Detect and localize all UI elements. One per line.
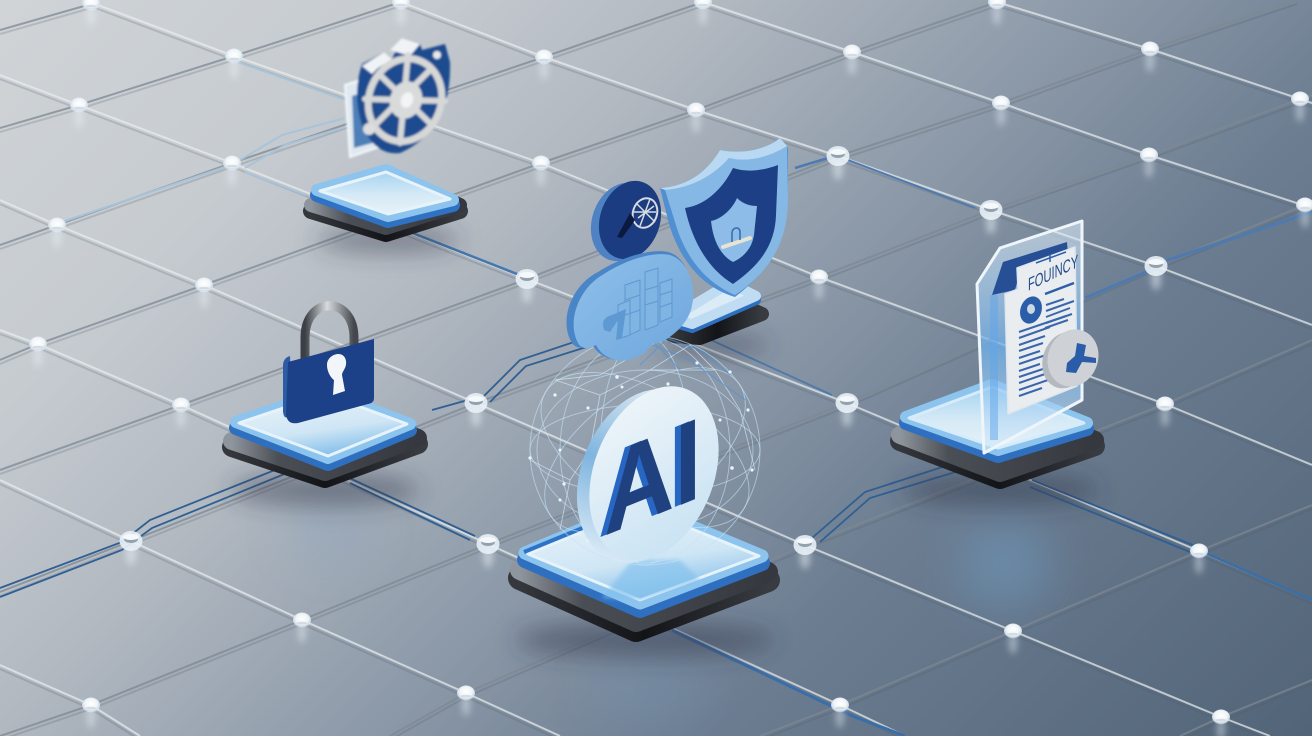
blue circuit traces, lower [0,155,1312,736]
floor glow reflections [285,500,1053,720]
icon: gear wheel [345,38,453,157]
lock shackle [305,306,354,362]
label: AI extrusion: AI [598,395,695,563]
shield inner [685,165,778,284]
icon: policy document [977,221,1106,453]
inner crest [711,198,757,262]
platform: policy [900,385,1095,479]
label: AI: AI [604,393,701,561]
icon: padlock [283,306,374,423]
platform shadows [230,228,1100,658]
icon: AI disc [553,367,742,583]
seal [1034,322,1106,395]
icon: shield [660,138,788,297]
glass panel [977,221,1082,453]
platform: lock [232,392,418,478]
lock body [283,339,374,423]
platform: gear [311,170,460,234]
icon: data cloud [566,251,693,361]
document title: FOUINCY [1028,252,1078,296]
shield shell [660,138,788,297]
icon: globe badge [581,173,671,269]
paper sheet [1005,247,1078,414]
icon: neural sphere [515,335,775,565]
blue circuit traces, upper [62,62,345,222]
platform: shield [672,283,762,338]
platform: AI [520,505,768,630]
